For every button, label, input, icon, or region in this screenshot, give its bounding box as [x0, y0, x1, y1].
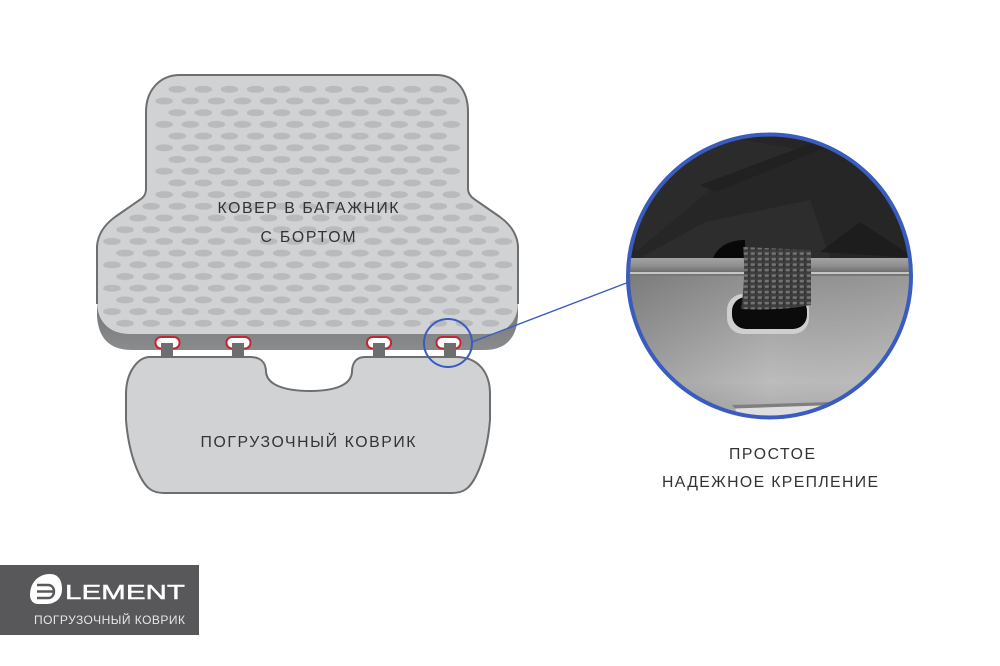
mat label — [218, 200, 399, 246]
logo badge — [0, 565, 199, 635]
slot in mat — [727, 294, 809, 334]
photo caption: НАДЕЖНОЕ КРЕПЛЕНИЕ — [662, 474, 878, 491]
trunk mat with side — [97, 75, 518, 350]
logo icon — [30, 574, 62, 604]
mat label: КОВЕР В БАГАЖНИК — [218, 200, 399, 217]
logo wordmark: LEMENT — [65, 582, 185, 604]
mat label: С БОРТОМ — [260, 229, 356, 246]
mat side band — [97, 300, 518, 350]
mat dimple rows — [102, 85, 514, 327]
mat outline — [97, 75, 518, 304]
strap — [741, 247, 811, 310]
loading mat label: ПОГРУЗОЧНЫЙ КОВРИК — [200, 432, 416, 451]
callout ring and leader line — [424, 282, 629, 367]
logo subtitle: ПОГРУЗОЧНЫЙ КОВРИК — [34, 612, 185, 627]
photo caption: ПРОСТОЕ — [729, 446, 815, 463]
attachment loops — [156, 337, 460, 357]
photo caption — [662, 446, 878, 491]
mat top surface — [97, 75, 518, 334]
loading mat — [126, 357, 490, 493]
detail photo — [625, 130, 915, 425]
